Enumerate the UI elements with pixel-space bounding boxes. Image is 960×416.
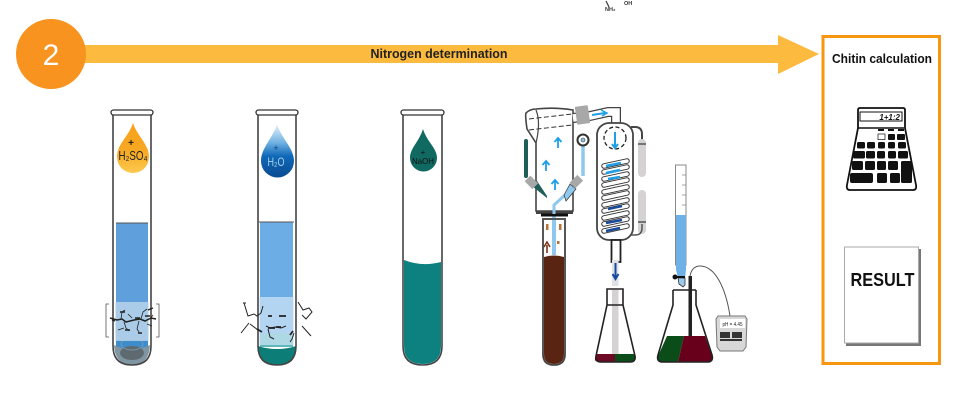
distillation apparatus <box>525 105 646 365</box>
drop: H2O: + <box>273 143 279 153</box>
drop: H2SO4: H₂SO₄ <box>118 149 148 163</box>
test tube: H2O <box>241 110 312 365</box>
pH probe cable <box>690 266 730 316</box>
titration flask <box>658 276 712 362</box>
drop: NaOH: NaOH <box>412 157 434 166</box>
molecule fragment at top edge: OH <box>624 1 632 7</box>
connector pipe <box>573 105 616 125</box>
drop: NaOH: + <box>421 148 426 157</box>
result label: RESULT <box>850 270 914 290</box>
pH meter <box>716 316 747 351</box>
heading: nitrogen determination: Nitrogen determination <box>370 46 508 61</box>
process arrow <box>80 35 819 74</box>
step number badge: 2 <box>43 39 59 72</box>
distillation head <box>525 108 588 216</box>
molecule: deacetylated chains <box>241 302 312 342</box>
drop: NaOH <box>410 129 437 171</box>
titration setup <box>658 165 747 362</box>
molecule fragment at top edge: NH₂ <box>605 7 616 13</box>
drop: H2SO4: + <box>128 138 134 149</box>
titration drops <box>681 296 683 334</box>
icon: result sheet <box>844 247 921 346</box>
test tube: H2SO4 <box>106 110 159 365</box>
panel: chitin calculation <box>823 36 940 364</box>
right inlet arm <box>581 145 585 176</box>
heading: chitin calculation: Chitin calculation <box>832 51 932 66</box>
pH meter: pH = 4.45 <box>722 322 743 328</box>
molecule: chitin chain <box>106 304 159 337</box>
receiving flask <box>595 289 635 362</box>
icon: calculator <box>847 108 916 190</box>
drop: H2SO4 <box>117 123 149 173</box>
drop: H2O: H₂O <box>268 155 284 169</box>
condenser <box>597 123 646 286</box>
test tube: NaOH <box>401 110 444 365</box>
step number badge <box>16 19 86 89</box>
blue vapour arrows <box>542 138 562 190</box>
molecule fragment at top edge <box>605 1 632 13</box>
icon: calculator: 1+1:2 <box>879 113 901 122</box>
digestion tube with brown sample <box>543 214 565 365</box>
left inlet arm <box>524 141 528 176</box>
drop: H2O <box>261 124 294 178</box>
burette <box>672 165 686 287</box>
